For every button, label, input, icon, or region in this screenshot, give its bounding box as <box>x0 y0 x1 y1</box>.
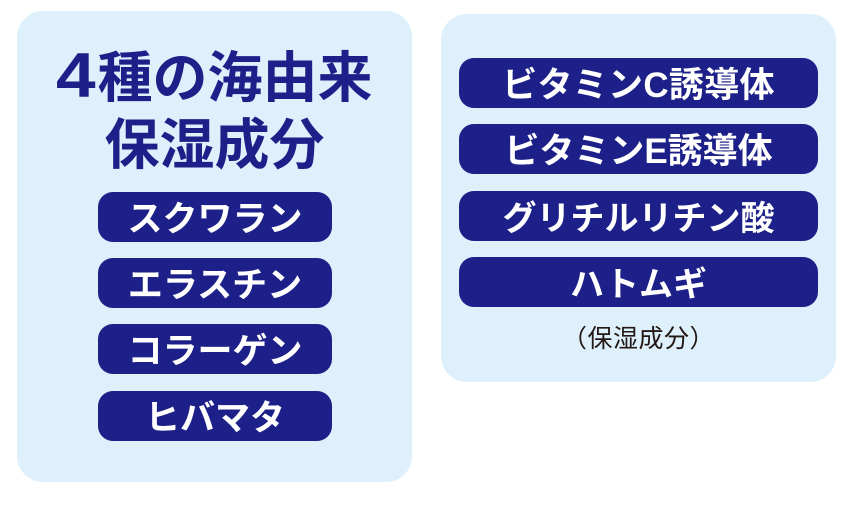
ingredient: hibamata <box>98 391 332 441</box>
ingredient: collagen: コラーゲン <box>127 332 302 371</box>
ingredient: glycyrrhizic acid: グリチルリチン酸 <box>502 200 774 238</box>
ingredient: hatomugi <box>459 257 818 307</box>
title line 1: 種の海由来 <box>97 47 372 109</box>
panel: marine moisturizing ingredients <box>17 11 412 482</box>
ingredient: vitamin E derivative <box>459 124 818 174</box>
ingredient: squalane <box>98 192 332 242</box>
note: moisturizing ingredient: （保湿成分） <box>562 325 715 353</box>
title line 1: 4 <box>56 41 96 111</box>
ingredient: vitamin C derivative <box>459 58 818 108</box>
ingredient: vitamin E derivative: ビタミンE誘導体 <box>504 132 773 171</box>
ingredient: hibamata: ヒバマタ <box>145 399 285 438</box>
ingredient: glycyrrhizic acid <box>459 191 818 241</box>
ingredient: elastin: エラスチン <box>128 266 302 305</box>
ingredient: vitamin C derivative: ビタミンC誘導体 <box>502 66 775 105</box>
title line 2: 保湿成分 <box>104 114 324 176</box>
ingredient: hatomugi: ハトムギ <box>570 266 707 304</box>
ingredient: elastin <box>98 258 332 308</box>
ingredient: collagen <box>98 324 332 374</box>
ingredient: squalane: スクワラン <box>127 200 302 239</box>
panel: other ingredients <box>441 14 836 382</box>
